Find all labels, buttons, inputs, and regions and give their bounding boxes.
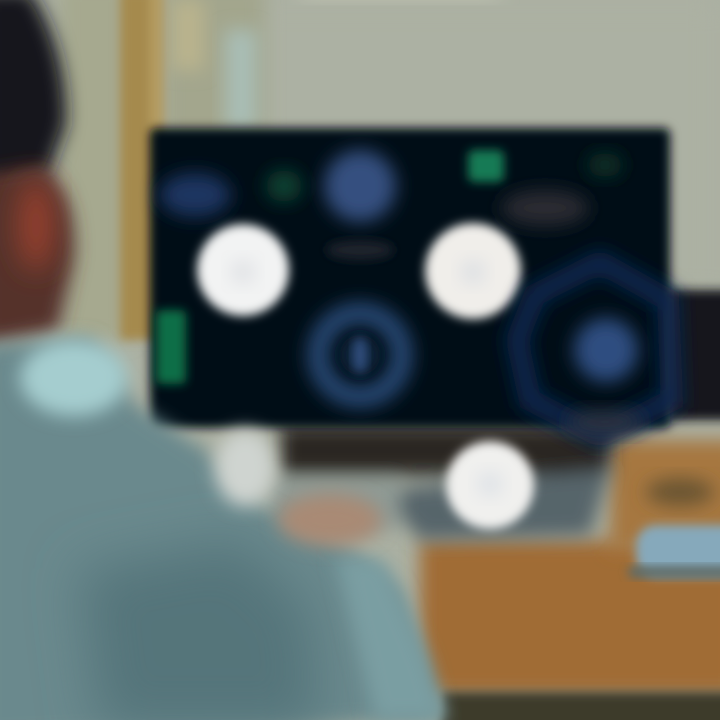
centre blue ring: [318, 313, 402, 397]
head and hair: [0, 0, 66, 195]
hand: [278, 494, 382, 546]
desk: [420, 440, 720, 720]
lower caption: [567, 410, 643, 434]
forearm highlight: [335, 555, 445, 720]
ear highlight: [18, 179, 54, 271]
torso and sleeve: [0, 338, 445, 720]
window frame: [120, 0, 164, 340]
green bar left: [156, 310, 186, 384]
white gauge bottom: [446, 441, 534, 529]
secondary dark box: [668, 290, 720, 420]
green marker centre: [468, 150, 504, 182]
monitor stand and base: [270, 425, 610, 540]
grey text block: [501, 190, 589, 226]
sleeve shadow: [80, 540, 320, 720]
top blue ring: [324, 150, 396, 222]
grey caption: [326, 240, 394, 260]
monitor screen: [150, 128, 672, 436]
white gauge bottom left faded: [215, 430, 275, 506]
right hexagonal blue ring: [517, 262, 672, 436]
green marker right: [587, 153, 623, 177]
light collar: [20, 340, 128, 416]
green marker left: [266, 170, 302, 202]
white gauge left: [197, 224, 289, 316]
neck and ear: [0, 165, 74, 345]
white gauge right: [425, 223, 521, 319]
person: [0, 0, 445, 720]
dark object on desk: [646, 478, 714, 506]
header blue panel: [159, 173, 231, 217]
light blue object on desk: [628, 525, 720, 578]
